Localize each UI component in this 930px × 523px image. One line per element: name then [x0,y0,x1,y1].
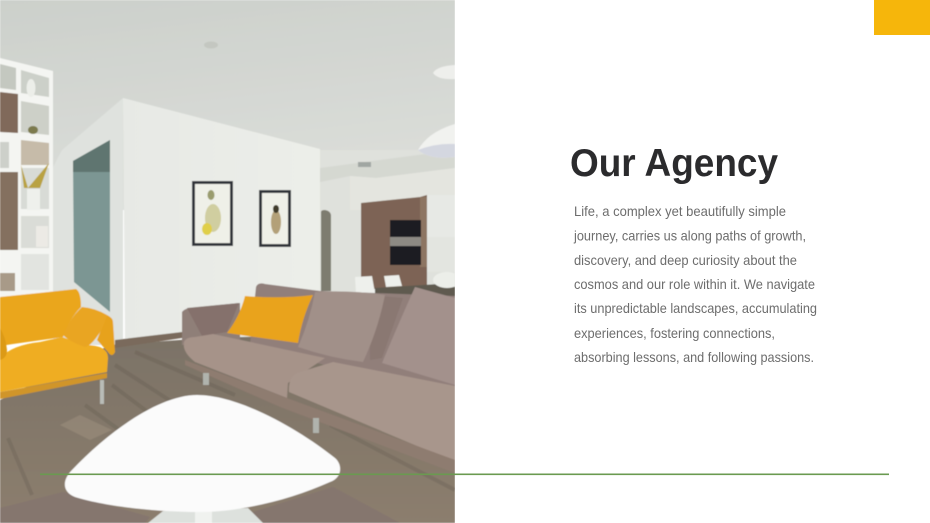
skirting board [115,332,182,348]
oven [390,220,421,237]
yellow armchair [0,289,115,404]
side wall [53,98,123,345]
body paragraph: Life, a complex yet beautifully simple [574,203,786,219]
dark column [321,210,331,291]
body paragraph: experiences, fostering connections, [574,325,775,341]
sofa [182,283,455,473]
artwork right [259,190,291,247]
body paragraph: cosmos and our role within it. We navigate [574,276,815,292]
kitchen back wall [320,210,455,292]
body paragraph: its unpredictable landscapes, accumulating [574,300,817,316]
body paragraph: absorbing lessons, and following passions. [574,349,814,365]
white upper cabinet [427,195,455,237]
ceiling spot [204,42,218,48]
yellow cushion [227,295,313,343]
body paragraph: journey, carries us along paths of growth, [573,228,806,244]
ceiling ring light [433,65,455,79]
table base [148,508,263,523]
photo: living room interior [0,0,461,523]
green divider line [40,474,889,475]
counter and chairs [355,272,461,297]
door [72,171,110,312]
orange corner block [874,0,930,35]
title: Our Agency [570,142,778,185]
rug [0,492,150,523]
main white wall [123,98,320,340]
floor planks [8,352,455,495]
artwork left [192,181,233,246]
body paragraph [573,203,817,365]
pendant lamp [418,124,455,150]
floor [0,330,455,523]
shelving unit [0,58,53,300]
kitchen soffit [320,155,454,181]
body paragraph: discovery, and deep curiosity about the [574,252,797,268]
wood kitchen cabinets [361,195,427,290]
ceiling [0,0,455,210]
coffee table [65,395,340,512]
